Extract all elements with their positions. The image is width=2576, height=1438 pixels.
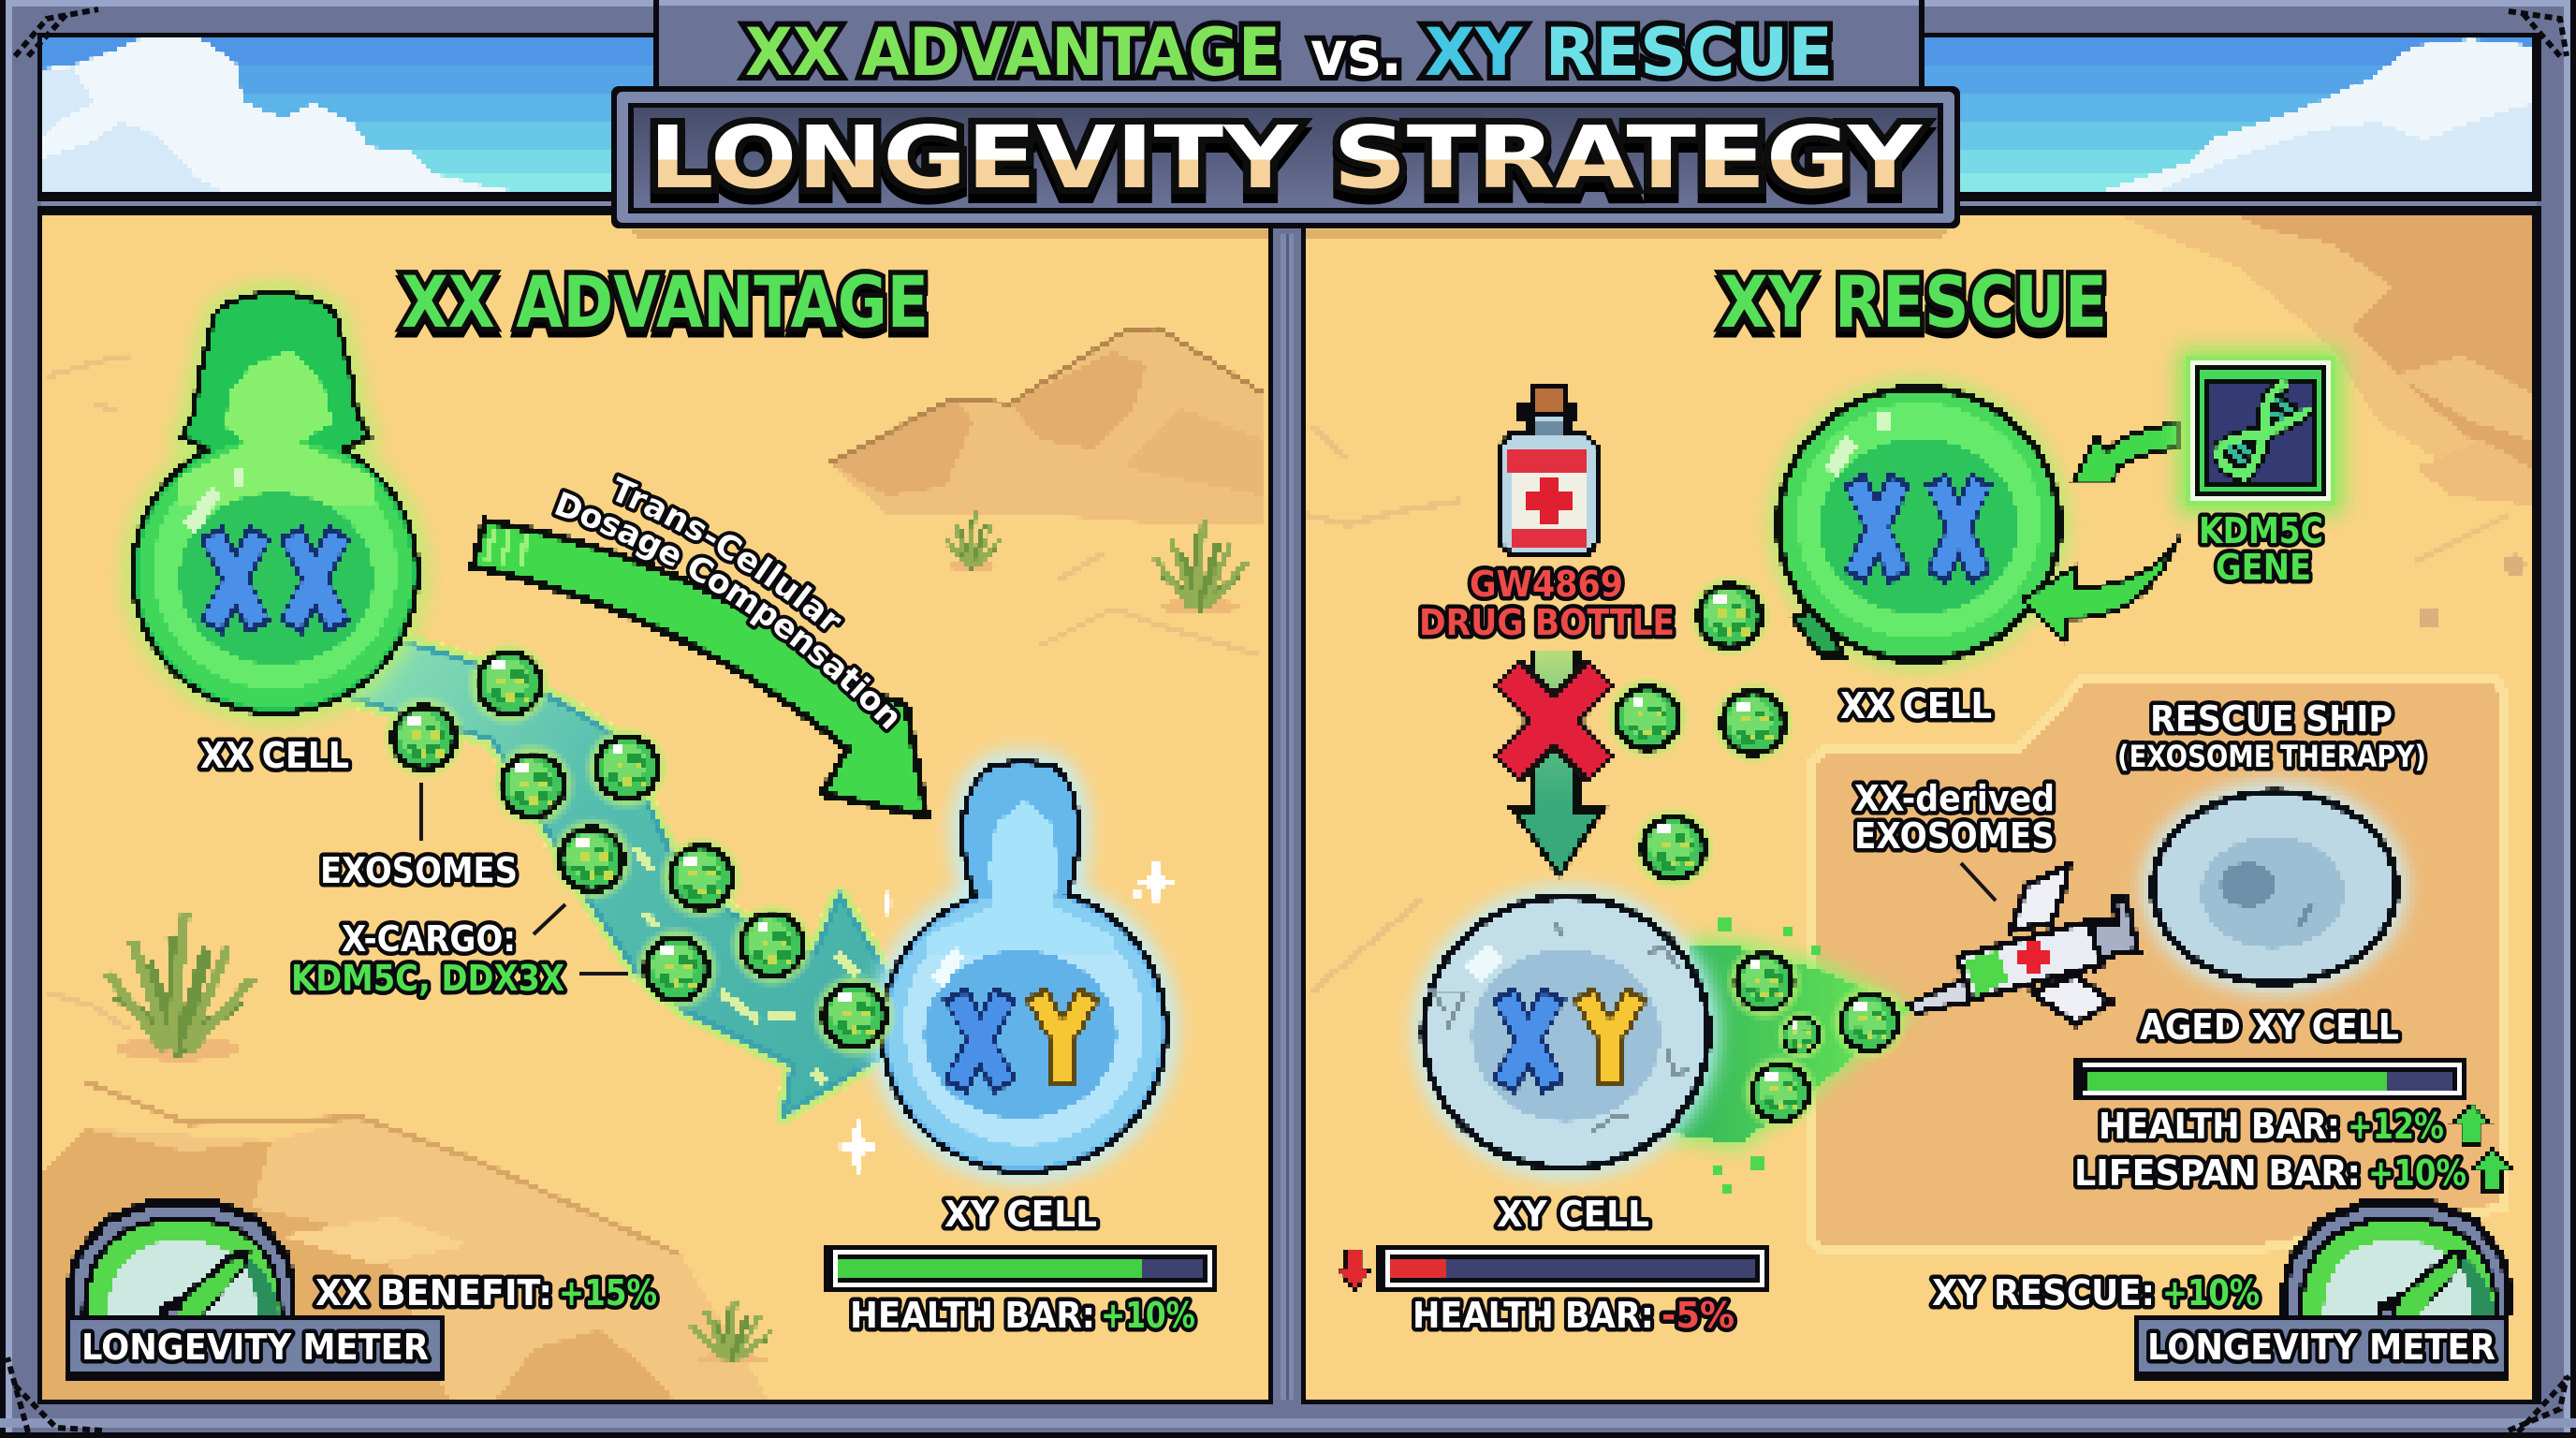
XY longevity plate — [2134, 1315, 2510, 1379]
label: KDM5C gene: GENE — [2216, 547, 2311, 588]
label: XX cell: XX CELL — [1840, 685, 1992, 726]
label: XX benefit: +15% — [559, 1272, 657, 1313]
exosome stream arrow — [351, 637, 920, 1114]
grass tuft small — [945, 513, 1001, 571]
title line 1 — [745, 14, 1833, 91]
label: aged health bar: +12% — [2348, 1106, 2444, 1147]
health down arrow — [1338, 1250, 1371, 1290]
barrel — [1957, 921, 2101, 1000]
KDM5C gene box — [2177, 348, 2344, 515]
chromosomes XX — [1854, 477, 1982, 579]
aged cell health bar frame — [2075, 1058, 2466, 1101]
barrel green dose — [1964, 950, 2009, 996]
label: lifespan bar: +10% — [2368, 1152, 2466, 1194]
green spray — [1666, 917, 1914, 1194]
panel art: XX advantage — [36, 208, 1274, 1405]
exosomes drifting — [1604, 573, 1796, 891]
small sand marks — [47, 356, 1259, 1030]
title line 1: XY RESCUE — [1425, 14, 1833, 91]
label: aged XY cell: AGED XY CELL — [2140, 1006, 2399, 1048]
XX cell — [136, 295, 415, 711]
chromosomes XY — [1503, 992, 1637, 1088]
panel art: XY rescue — [1300, 208, 2541, 1405]
rescue ship syringe — [1910, 865, 2138, 1024]
label: GW4869 drug bottle: GW4869 — [1470, 564, 1623, 605]
upper wing — [2011, 865, 2069, 932]
label: rescue ship: RESCUE SHIP — [2150, 698, 2393, 740]
KDM5C arrow upper — [2072, 423, 2179, 482]
label: lifespan bar: LIFESPAN BAR: — [2074, 1152, 2361, 1194]
sand dune upper right — [2117, 215, 2532, 506]
exosomes along stream — [381, 640, 898, 1059]
drug bottle — [1498, 382, 1599, 558]
chromosomes XX — [211, 531, 340, 628]
label: XY health bar: HEALTH BAR: — [850, 1295, 1095, 1336]
panel: XX advantage — [37, 206, 1273, 1404]
XY health bar frame — [826, 1246, 1218, 1292]
heading: XY rescue: XY RESCUE — [1720, 260, 2107, 344]
label: XY health bar: -5% — [1661, 1295, 1734, 1336]
sky right with clouds — [1919, 31, 2542, 199]
label: KDM5C gene: KDM5C — [2199, 510, 2323, 551]
label: x-cargo: KDM5C, DDX3X — [291, 958, 564, 999]
XY cell — [885, 765, 1164, 1169]
health up arrow — [2452, 1104, 2492, 1144]
label: GW4869 drug bottle — [1419, 564, 1675, 643]
XY health bar frame — [1378, 1246, 1769, 1292]
label: XY cell: XY CELL — [1497, 1194, 1649, 1235]
label: longevity meter left: LONGEVITY METER — [81, 1327, 429, 1368]
title line 1: vs. — [1310, 18, 1402, 90]
exosomes in spray — [1726, 944, 1908, 1131]
label: x-cargo — [291, 904, 628, 999]
heading: XX advantage: XX ADVANTAGE — [402, 260, 929, 344]
label: XY cell: XY CELL — [944, 1194, 1097, 1235]
chromosomes XY — [955, 992, 1090, 1088]
label line: exosomes — [419, 783, 423, 841]
XX longevity plate — [66, 1315, 445, 1379]
aged XY cell disc — [2144, 783, 2406, 992]
XX benefit longevity dome — [66, 1198, 297, 1315]
sky left with clouds — [36, 31, 659, 199]
lower wing — [2031, 976, 2112, 1024]
title lower plate — [611, 86, 1960, 228]
KDM5C arrow lower — [2023, 536, 2180, 642]
title upper plate — [653, 0, 1925, 107]
title banner — [611, 0, 1960, 228]
label: XY rescue: XY RESCUE: — [1932, 1272, 2155, 1313]
panel: XY rescue — [1300, 208, 2541, 1405]
sand dune upper right — [829, 328, 1265, 524]
red X block — [1507, 672, 1601, 770]
grass tuft large — [110, 918, 250, 1061]
title line 2: LONGEVITY STRATEGY — [649, 108, 1924, 208]
aged XY cell target — [1414, 888, 1718, 1178]
DNA helix icon — [2218, 384, 2305, 476]
label: aged health bar: HEALTH BAR: — [2099, 1106, 2340, 1147]
label: x-cargo: X-CARGO: — [342, 918, 516, 960]
XX cell donor — [1771, 380, 2067, 668]
sand dune lower left — [41, 1081, 769, 1400]
lifespan up arrow — [2473, 1149, 2512, 1191]
curved caption: trans-cellular: Trans-Cellular — [612, 472, 845, 633]
red cross — [2017, 941, 2051, 974]
label: GW4869 drug bottle: DRUG BOTTLE — [1419, 602, 1675, 643]
label: XX-derived exosomes: XX-derived — [1854, 778, 2055, 819]
XY rescue longevity dome — [2281, 1198, 2512, 1315]
blocked transfer arrow — [1508, 651, 1608, 880]
curved caption: trans-cellular: Dosage Compensation — [551, 488, 900, 734]
label: longevity meter right: LONGEVITY METER — [2147, 1327, 2496, 1368]
grass tuft bottom — [694, 1301, 772, 1365]
label: XX benefit: XX BENEFIT: — [315, 1272, 552, 1313]
label: XX cell: XX CELL — [200, 735, 349, 776]
small sand marks and rocks — [1306, 426, 2525, 992]
label: XY rescue: +10% — [2162, 1272, 2260, 1313]
label: rescue ship — [2117, 698, 2426, 774]
grass tuft medium — [1157, 523, 1245, 615]
label: rescue ship: (EXOSOME THERAPY) — [2117, 739, 2426, 774]
needle — [1910, 978, 1969, 1013]
big green arrow trans-cellular — [473, 521, 927, 816]
sparkles — [835, 854, 1177, 1178]
label: KDM5C gene — [2199, 510, 2323, 588]
label: XX-derived exosomes: EXOSOMES — [1854, 815, 2055, 857]
plunger — [2092, 899, 2138, 969]
rescue ship zone — [1810, 678, 2503, 1251]
title line 1: XX ADVANTAGE — [745, 14, 1281, 91]
label: XX-derived exosomes — [1854, 778, 2055, 901]
label: XY health bar: HEALTH BAR: — [1412, 1295, 1654, 1336]
label: XY health bar: +10% — [1101, 1295, 1195, 1336]
label: exosomes: EXOSOMES — [320, 850, 518, 891]
